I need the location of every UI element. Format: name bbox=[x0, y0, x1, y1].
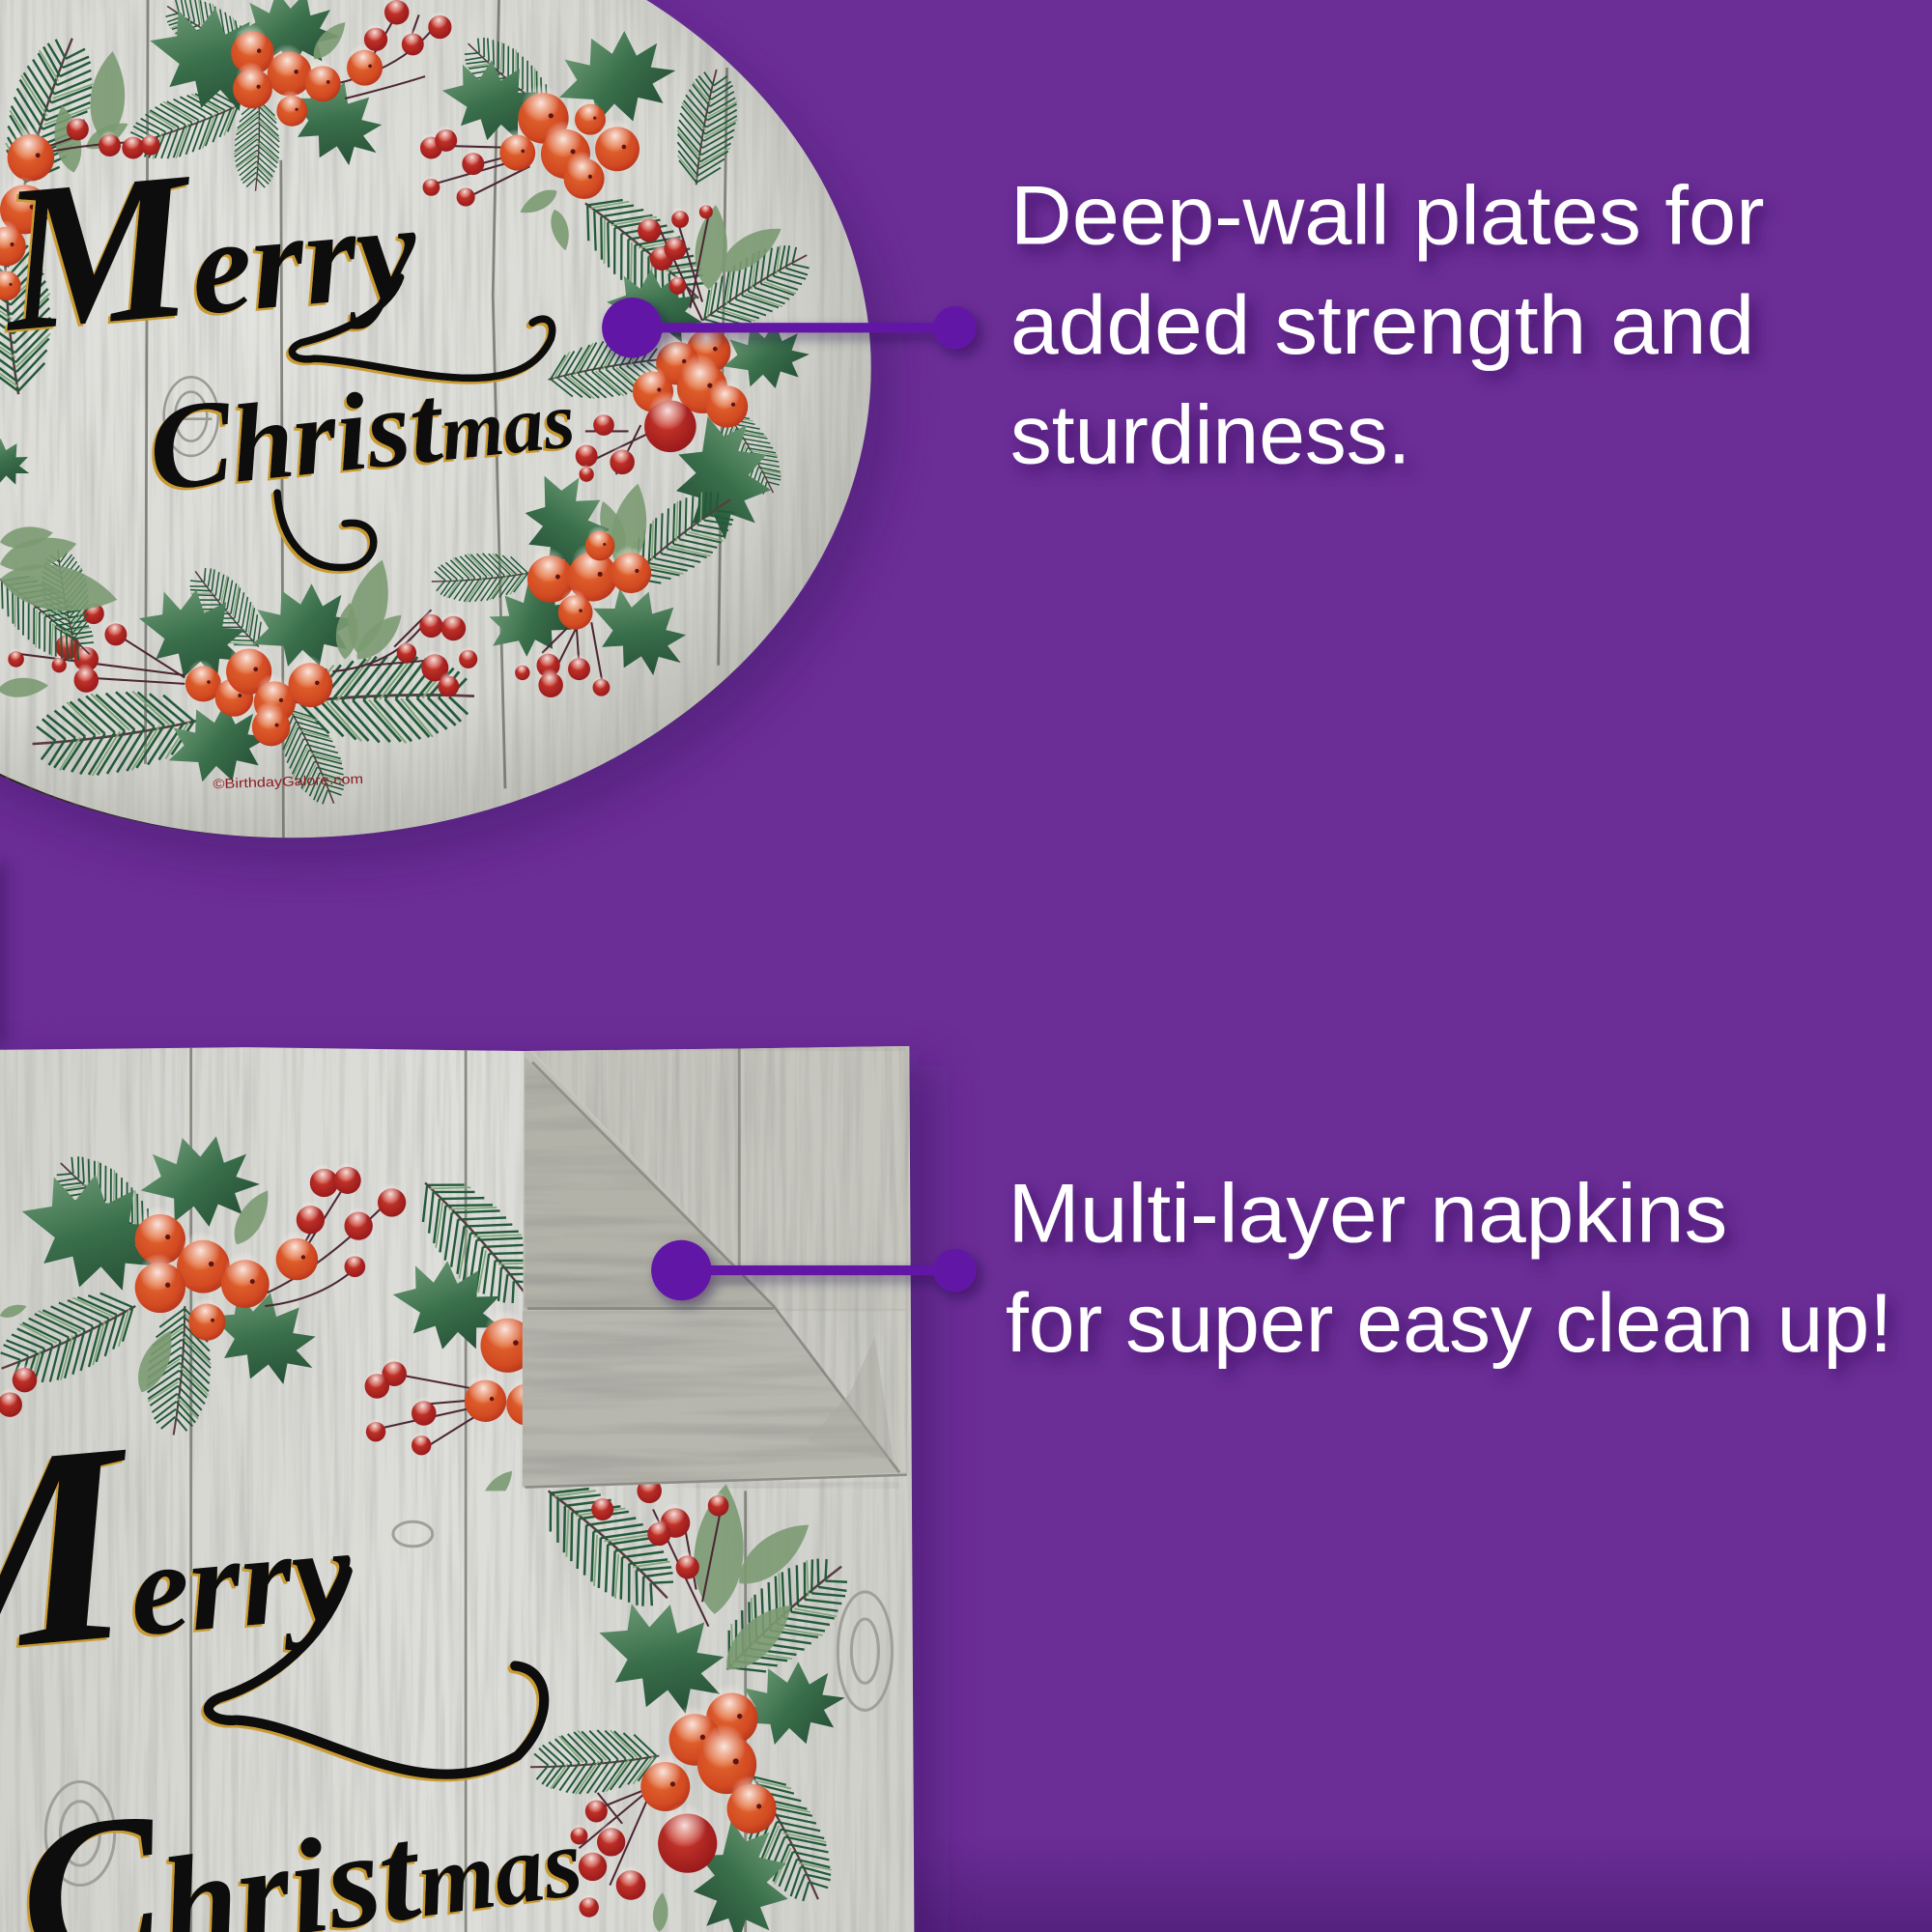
wreath cluster: top left bbox=[120, 0, 451, 191]
napkin wood knots bbox=[45, 1521, 892, 1886]
plate copyright: ©BirthdayGalore.com bbox=[213, 771, 363, 791]
napkin flourish bbox=[209, 1571, 544, 1775]
panel: paper plate bbox=[0, 0, 875, 842]
flap knot bbox=[807, 1337, 894, 1460]
flap vertical grain bbox=[523, 1047, 909, 1489]
flap right corner bbox=[779, 1311, 906, 1472]
plate plank seams bbox=[146, 0, 727, 838]
plate wood grain bbox=[0, 0, 875, 840]
background left shading bbox=[0, 863, 8, 1047]
wreath cluster: lower left bbox=[0, 433, 122, 699]
callout: plates connector bbox=[602, 298, 977, 358]
plate word: Merry: Merry bbox=[0, 108, 425, 376]
napkin cluster: right sprigs bbox=[522, 1463, 867, 1759]
text block: plates bbox=[1010, 169, 1765, 482]
napkin cluster: behind fold bbox=[365, 1158, 555, 1578]
flap shaded seams bbox=[527, 1048, 899, 1472]
connector end dot bbox=[933, 1249, 977, 1292]
plate flourish bbox=[277, 277, 553, 568]
plate shadow bbox=[0, 0, 892, 865]
flap folded triangle bbox=[525, 1057, 777, 1309]
text block: napkins bbox=[1006, 1167, 1892, 1370]
napkin cluster: upper left bbox=[0, 1131, 406, 1437]
flap horizontal grain bbox=[523, 1047, 909, 1489]
background bottom shading bbox=[914, 1836, 1932, 1932]
napkin wood surface bbox=[0, 1041, 918, 1932]
connector start dot bbox=[651, 1240, 712, 1300]
plate script: Merry Christmas bbox=[0, 108, 580, 568]
text block: plates: Deep-wall plates for bbox=[1010, 169, 1765, 263]
connector line bbox=[681, 1265, 955, 1275]
plate wood surface bbox=[0, 0, 871, 838]
flap upper region bbox=[529, 1051, 906, 1309]
wreath cluster: lower right bbox=[431, 475, 734, 697]
napkin wood grain bbox=[0, 1041, 918, 1932]
plate dark rim bbox=[0, 653, 752, 838]
napkin plank seams bbox=[191, 1047, 746, 1932]
text block: napkins: Multi-layer napkins bbox=[1008, 1167, 1727, 1261]
wreath cluster: bottom bbox=[8, 555, 477, 814]
napkin cluster: lower right bbox=[527, 1684, 848, 1932]
plate wood knot bbox=[164, 377, 218, 456]
panel: napkin bbox=[0, 1041, 918, 1932]
text block: napkins: for super easy clean up! bbox=[1006, 1276, 1892, 1370]
wreath cluster: right bbox=[544, 65, 823, 547]
flap base bbox=[523, 1046, 909, 1488]
napkin script: Merry Christmas bbox=[0, 1366, 592, 1932]
callout: napkins connector bbox=[651, 1240, 977, 1300]
text block: plates: sturdiness. bbox=[1010, 388, 1410, 482]
wreath cluster: upper left bbox=[0, 27, 160, 398]
wreath cluster: top right bbox=[420, 19, 686, 252]
text block: plates: added strength and bbox=[1010, 278, 1754, 372]
connector line bbox=[632, 323, 955, 332]
napkin fold flap bbox=[523, 1046, 909, 1489]
panel: napkin shadow bbox=[13, 1065, 934, 1932]
connector end dot bbox=[933, 306, 977, 350]
connector start dot bbox=[602, 298, 663, 358]
flap lower band bbox=[523, 1311, 899, 1488]
plate word: Christmas: Christmas bbox=[143, 336, 580, 517]
